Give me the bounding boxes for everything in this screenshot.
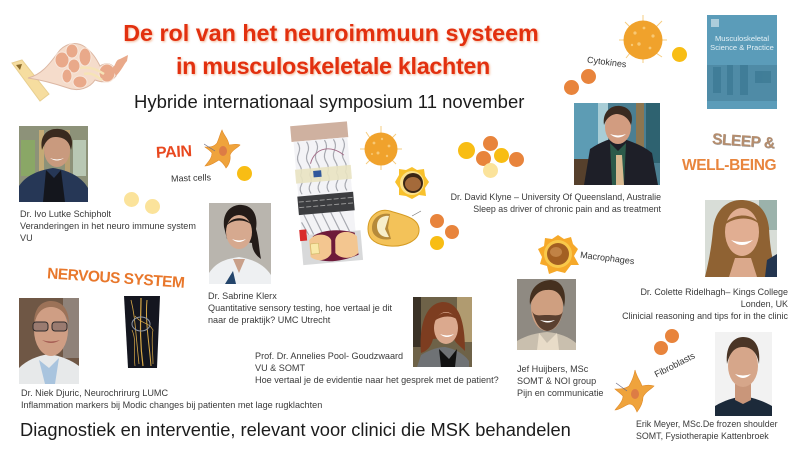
dot (672, 47, 687, 62)
journal cover: Musculoskeletal (715, 34, 769, 43)
photo: Erik Meyer (715, 332, 772, 416)
label: macrophages: Macrophages (580, 250, 635, 266)
photo: Annelies Pool-Goudzwaard (413, 297, 472, 367)
heading: nervous system: NERVOUS SYSTEM (47, 265, 185, 292)
image: joint tissue layers (290, 121, 363, 265)
speaker text: David Klyne: Dr. David Klyne – University Of Queensland, Australie (451, 192, 661, 202)
dot (564, 80, 579, 95)
photo: Niek Djuric (19, 298, 79, 384)
speaker text: Jef Huijbers: Jef Huijbers, MSc (517, 364, 588, 374)
speaker text: Erik Meyer: Erik Meyer, MSc.De frozen shoulder (636, 419, 778, 429)
speaker text: Annelies Pool-Goudzwaard (255, 351, 499, 385)
speaker text: Ivo Lutke Schipholt: Veranderingen in het neuro immune system (20, 221, 196, 231)
icon: fibroblast (614, 370, 654, 412)
speaker text: Sabrine Klerx: naar de praktijk? UMC Utrecht (208, 315, 330, 325)
speaker text: Annelies Pool-Goudzwaard: Hoe vertaal je de evidentie naar het gesprek met de patient? (255, 375, 499, 385)
dot (237, 166, 252, 181)
dot cluster upper centre (458, 136, 524, 178)
photo: Jef Huijbers (517, 279, 576, 350)
dot (581, 69, 596, 84)
title: De rol van het neuroimmuun systeem (123, 20, 539, 46)
speaker text: Erik Meyer (636, 419, 778, 441)
label: mast cells: Mast cells (171, 172, 211, 184)
speaker text: Erik Meyer: SOMT, Fysiotherapie Kattenbroek (636, 431, 769, 441)
image: leg nerves (124, 296, 160, 368)
heading: sleep and well-being: SLEEP & (712, 131, 775, 152)
title (123, 20, 540, 79)
speaker text: Colette Ridelhagh: Dr. Colette Ridelhagh– Kings College (640, 287, 788, 297)
journal cover (707, 15, 777, 109)
dots: fibroblasts (654, 329, 679, 355)
speaker text: Sabrine Klerx: Dr. Sabrine Klerx (208, 291, 277, 301)
speaker text: David Klyne (451, 192, 661, 214)
heading: sleep and well-being: WELL-BEING (682, 157, 776, 174)
heading: pain: PAIN (156, 143, 192, 162)
subtitle: Hybride internationaal symposium 11 november (134, 91, 524, 112)
speaker text: Niek Djuric (21, 388, 322, 410)
speaker text: Annelies Pool-Goudzwaard: VU & SOMT (255, 363, 305, 373)
icon: cytokine cell small (360, 126, 402, 170)
dot (124, 192, 139, 207)
dot cluster lower centre (430, 214, 459, 250)
title: in musculoskeletale klachten (176, 53, 490, 79)
speaker text: Ivo Lutke Schipholt: VU (20, 233, 33, 243)
icon: macrophage (538, 235, 579, 274)
icon: cytokine cell large (619, 15, 667, 63)
speaker text: Jef Huijbers: Pijn en communicatie (517, 388, 603, 398)
photo: Colette Ridelhagh (705, 200, 777, 277)
footer statement: Diagnostiek en interventie, relevant voor clinici die MSK behandelen (20, 419, 571, 440)
icon: macrophage cell (395, 167, 429, 199)
speaker text: Sabrine Klerx: Quantitative sensory testing, hoe vertaal je dit (208, 303, 392, 313)
journal cover: Science & Practice (710, 43, 774, 52)
speaker text: Niek Djuric: Dr. Niek Djuric, Neurochrirurg LUMC (21, 388, 168, 398)
dot (145, 199, 160, 214)
label: fibroblasts: Fibroblasts (653, 351, 696, 379)
photo: Ivo Lutke Schipholt (19, 126, 88, 202)
speaker text: Jef Huijbers (517, 364, 603, 398)
heading: sleep and well-being (682, 131, 776, 174)
speaker text: Colette Ridelhagh: Londen, UK (741, 299, 788, 309)
speaker text: Colette Ridelhagh: Clinicial reasoning and tips for in the clinic (622, 311, 788, 321)
speaker text: Colette Ridelhagh (622, 287, 788, 321)
icon: muscle anatomy (11, 43, 128, 102)
speaker text: Ivo Lutke Schipholt (20, 209, 196, 243)
photo: David Klyne (574, 103, 660, 185)
speaker text: Jef Huijbers: SOMT & NOI group (517, 376, 596, 386)
speaker text: Sabrine Klerx (208, 291, 392, 325)
photo: Sabrine Klerx (209, 203, 271, 284)
icon: large yellow cell (368, 210, 422, 247)
label: cytokines: Cytokines (587, 55, 627, 69)
icon: mast cell (204, 129, 240, 168)
speaker text: Annelies Pool-Goudzwaard: Prof. Dr. Annelies Pool- Goudzwaard (255, 351, 403, 361)
speaker text: Ivo Lutke Schipholt: Dr. Ivo Lutke Schipholt (20, 209, 111, 219)
speaker text: David Klyne: Sleep as driver of chronic pain and as treatment (473, 204, 661, 214)
speaker text: Niek Djuric: Inflammation markers bij Modic changes bij patienten met lage rugklachten (21, 400, 322, 410)
